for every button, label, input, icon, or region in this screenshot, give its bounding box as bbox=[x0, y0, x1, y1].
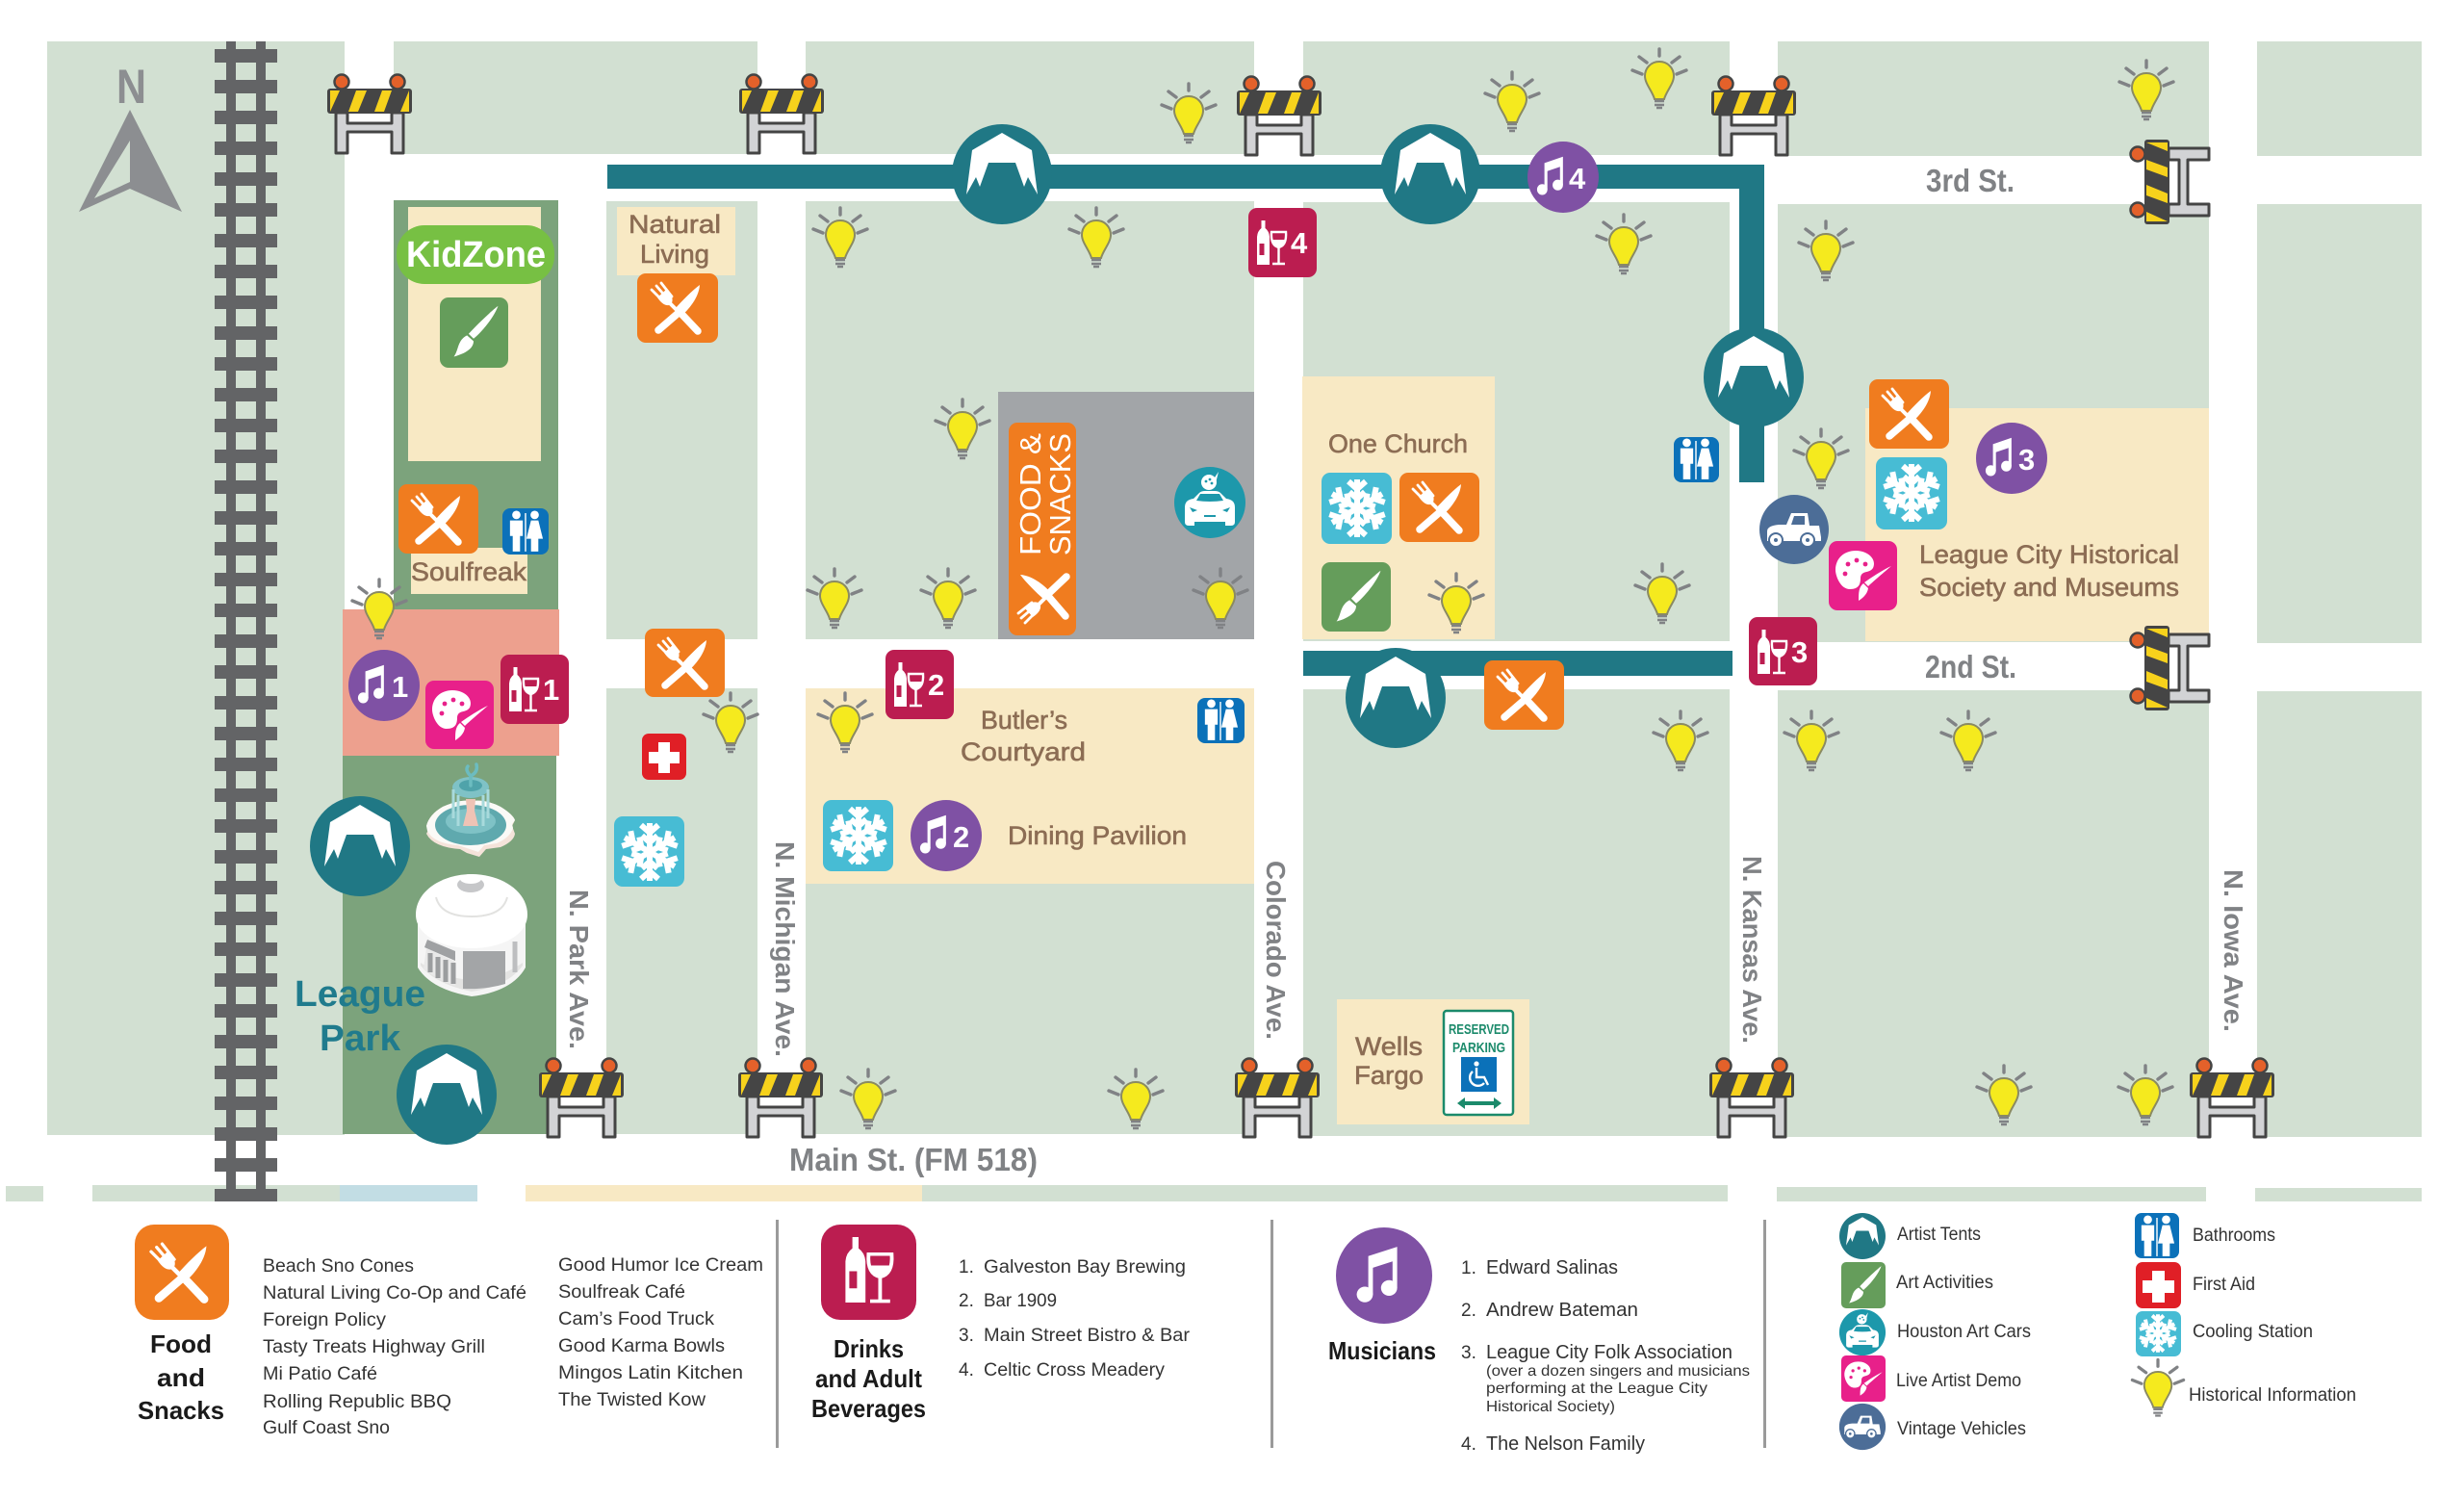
list: food vendors column 2: The Twisted Kow bbox=[558, 1390, 706, 1410]
icon: cooling park bbox=[614, 816, 684, 887]
label: League City Historical Society and Museums: Society and Museums bbox=[1919, 573, 2179, 602]
label: KidZone: KidZone bbox=[406, 235, 546, 275]
list: drinks venues bbox=[959, 1257, 1191, 1381]
label: Dining Pavilion: Dining Pavilion bbox=[1008, 821, 1187, 850]
label: League City Historical Society and Museums: League City Historical bbox=[1919, 540, 2179, 569]
label: Butler's Courtyard bbox=[961, 706, 1086, 766]
key: art activities: Art Activities bbox=[1896, 1273, 1993, 1293]
list: food vendors column 2: Mingos Latin Kitchen bbox=[558, 1363, 743, 1383]
icon: historical bulb bbox=[1794, 429, 1848, 488]
panel: food and snacks sign bbox=[1009, 423, 1077, 635]
list: food vendors column 1: Rolling Republic BBQ bbox=[263, 1392, 451, 1412]
list: food vendors column 1: Gulf Coast Sno bbox=[263, 1418, 390, 1438]
key: vintage vehicles: Vintage Vehicles bbox=[1897, 1419, 2026, 1439]
street label: Main St.: Main St. (FM 518) bbox=[789, 1142, 1038, 1177]
icon: historical bulb bbox=[704, 693, 757, 752]
icon: musician 3 bbox=[1976, 423, 2047, 494]
list: food vendors column 1: Tasty Treats Highway Grill bbox=[263, 1337, 485, 1357]
barricade bbox=[1711, 77, 1796, 155]
icon: artist tent bbox=[310, 796, 410, 896]
icon: food Soulfreak bbox=[398, 484, 478, 554]
key: houston art cars bbox=[1839, 1309, 2031, 1355]
icon: historical bulb bbox=[818, 693, 872, 752]
list: drinks venues: Galveston Bay Brewing bbox=[984, 1257, 1186, 1278]
street label: 3rd St.: 3rd St. bbox=[1926, 163, 2015, 198]
panel: strip tints along Main St bbox=[340, 1185, 922, 1201]
railway bbox=[215, 41, 277, 1201]
label: Wells Fargo: Fargo bbox=[1354, 1061, 1424, 1090]
heading: Food and Snacks: and bbox=[157, 1363, 205, 1392]
street label: 2nd St.: 2nd St. bbox=[1925, 649, 2016, 684]
label: One Church: One Church bbox=[1328, 429, 1468, 458]
icon: cooling League City bbox=[1876, 457, 1947, 529]
icon: drinks bbox=[821, 1225, 916, 1320]
barricade bbox=[1709, 1059, 1794, 1137]
icon: musician 1 bbox=[348, 650, 420, 721]
icon: bathrooms Soulfreak bbox=[502, 508, 549, 555]
heading: Food and Snacks: Snacks bbox=[138, 1396, 224, 1425]
list: drinks venues: 3. bbox=[959, 1326, 974, 1346]
barricade bbox=[1235, 1059, 1320, 1137]
icon: musicians bbox=[1336, 1227, 1432, 1324]
icon: houston art car bbox=[1174, 467, 1245, 538]
icon: artist tent bbox=[1346, 648, 1446, 748]
list: musicians: 2. bbox=[1461, 1301, 1476, 1321]
list: musicians: Edward Salinas bbox=[1486, 1257, 1618, 1278]
street label: N. Kansas Ave.: N. Kansas Ave. bbox=[1737, 856, 1767, 1044]
list: musicians: performing at the League City bbox=[1486, 1381, 1707, 1397]
list: food vendors column 2: Good Humor Ice Cream bbox=[558, 1255, 763, 1276]
barricade bbox=[738, 1059, 823, 1137]
icon: musician 4: 4 bbox=[1569, 162, 1586, 195]
label: Natural Living bbox=[629, 210, 721, 269]
key: cooling station bbox=[2136, 1311, 2313, 1356]
street label: N. Iowa Ave.: N. Iowa Ave. bbox=[2219, 869, 2248, 1032]
icon: artist tent bbox=[397, 1045, 497, 1145]
panel: icon key column 2 bbox=[2132, 1213, 2356, 1415]
icon: cooling One Church bbox=[1322, 473, 1392, 544]
key: historical information bbox=[2132, 1360, 2356, 1415]
icon: drinks 3: 3 bbox=[1791, 635, 1808, 669]
list: musicians: 3. bbox=[1461, 1343, 1476, 1363]
heading: Drinks and Adult Beverages: Drinks bbox=[834, 1334, 904, 1363]
key: live artist demo: Live Artist Demo bbox=[1896, 1371, 2021, 1391]
icon: art activities KidZone bbox=[440, 297, 508, 368]
icon: historical bulb bbox=[1429, 574, 1483, 632]
icon: historical bulb bbox=[813, 208, 867, 267]
list: drinks venues: Main Street Bistro & Bar bbox=[984, 1326, 1191, 1346]
label: Natural Living: Natural bbox=[629, 210, 721, 239]
panel: icon key column 1 bbox=[1839, 1213, 2031, 1450]
key: cooling station: Cooling Station bbox=[2193, 1322, 2313, 1342]
icon: historical bulb bbox=[1784, 711, 1838, 770]
icon: drinks 4: 4 bbox=[1291, 226, 1308, 260]
barricade bbox=[327, 75, 412, 153]
icon: musician 4 bbox=[1527, 142, 1599, 213]
icon: historical bulb bbox=[1597, 215, 1651, 273]
key: vintage vehicles bbox=[1839, 1404, 2026, 1450]
icon: vintage vehicle bbox=[1759, 495, 1829, 564]
key: first aid bbox=[2136, 1262, 2255, 1308]
icon: historical bulb bbox=[921, 569, 975, 628]
icon: musician 1: 1 bbox=[392, 670, 408, 704]
icon: drinks 2: 2 bbox=[928, 668, 944, 702]
image: gazebo bbox=[416, 874, 527, 996]
barricade bbox=[1237, 77, 1322, 155]
label: Wells Fargo bbox=[1354, 1032, 1424, 1090]
icon: historical bulb bbox=[2118, 1066, 2172, 1124]
panel: map blocks bbox=[6, 41, 2422, 1201]
icon: first aid bbox=[642, 734, 686, 780]
icon: historical bulb bbox=[2119, 61, 2173, 119]
panel: venue areas bbox=[617, 207, 2209, 1124]
icon: food 2nd St. west bbox=[645, 629, 725, 697]
icon: historical bulb bbox=[1162, 84, 1216, 142]
key: first aid: First Aid bbox=[2193, 1275, 2255, 1295]
icon: live artist demo park bbox=[425, 681, 494, 749]
list: musicians: 1. bbox=[1461, 1258, 1476, 1278]
icon: historical bulb bbox=[936, 400, 989, 458]
list: musicians bbox=[1461, 1257, 1750, 1455]
list: musicians: The Nelson Family bbox=[1486, 1433, 1645, 1455]
list: food vendors column 1: Foreign Policy bbox=[263, 1310, 387, 1330]
icon: food League City bbox=[1869, 379, 1949, 449]
label: Wells Fargo: Wells bbox=[1355, 1032, 1423, 1061]
barricade: 2nd St. east bbox=[2131, 626, 2209, 710]
list: drinks venues: 2. bbox=[959, 1291, 974, 1311]
list: food vendors column 1: Mi Patio Café bbox=[263, 1364, 377, 1384]
panel: food and snacks sign: SNACKS bbox=[1043, 433, 1077, 555]
list: drinks venues: Bar 1909 bbox=[984, 1291, 1057, 1311]
icon: north arrow: N bbox=[116, 60, 146, 114]
icon: historical bulb bbox=[1632, 49, 1686, 108]
icon: historical bulb park bbox=[352, 580, 406, 638]
icon: historical bulb bbox=[1109, 1070, 1163, 1128]
list: food vendors column 1 bbox=[263, 1256, 526, 1438]
list: drinks venues: 4. bbox=[959, 1360, 974, 1381]
list: food vendors column 2: Soulfreak Café bbox=[558, 1282, 685, 1303]
heading: Drinks and Adult Beverages: Beverages bbox=[811, 1394, 926, 1423]
panel: drinks legend bbox=[811, 1225, 1191, 1423]
street label: N. Park Ave.: N. Park Ave. bbox=[564, 890, 594, 1049]
icon: reserved parking sign bbox=[1444, 1011, 1513, 1115]
icon: historical bulb bbox=[1635, 564, 1689, 623]
label: Soulfreak: Soulfreak bbox=[411, 557, 527, 586]
icon: north arrow bbox=[79, 60, 182, 212]
icon: historical bulb bbox=[841, 1070, 895, 1128]
icon: drinks 2 bbox=[886, 650, 954, 719]
icon: artist tent bbox=[1380, 124, 1480, 224]
panel: league park and kid zone greens bbox=[343, 200, 559, 1134]
icon: food One Church bbox=[1399, 473, 1479, 542]
icon: bathrooms east bbox=[1674, 437, 1719, 482]
icon: historical bulb bbox=[1799, 221, 1853, 280]
icon: drinks 4 bbox=[1248, 208, 1317, 277]
label: Natural Living: Living bbox=[640, 240, 709, 269]
label: Butler's Courtyard: Courtyard bbox=[961, 737, 1086, 766]
panel: food and snacks sign: FOOD & bbox=[1014, 433, 1047, 555]
label: League Park bbox=[295, 974, 425, 1059]
icon: musician 3: 3 bbox=[2018, 443, 2035, 477]
list: musicians: Andrew Bateman bbox=[1486, 1300, 1638, 1321]
icon: musician 2 bbox=[911, 800, 982, 871]
icon: historical bulb bbox=[1941, 711, 1995, 770]
heading: Drinks and Adult Beverages: and Adult bbox=[815, 1364, 922, 1393]
heading: Drinks and Adult Beverages bbox=[811, 1334, 926, 1423]
icon: food Natural Living bbox=[637, 273, 718, 343]
street label: N. Michigan Ave.: N. Michigan Ave. bbox=[770, 841, 800, 1057]
barricade: 3rd St. east bbox=[2131, 140, 2209, 224]
artist tent route bbox=[607, 165, 1764, 676]
list: food vendors column 2: Good Karma Bowls bbox=[558, 1336, 725, 1356]
barricade bbox=[739, 75, 824, 153]
icon: drinks 3 bbox=[1749, 617, 1817, 685]
list: musicians: (over a dozen singers and musicians bbox=[1486, 1363, 1750, 1380]
icon: musician 2: 2 bbox=[953, 820, 969, 854]
icon: historical bulb bbox=[1069, 208, 1123, 267]
street label: Colorado Ave.: Colorado Ave. bbox=[1261, 861, 1291, 1040]
list: musicians: League City Folk Association bbox=[1486, 1342, 1732, 1363]
icon: reserved parking sign: RESERVED bbox=[1449, 1021, 1509, 1038]
icon: artist tent bbox=[1704, 327, 1804, 427]
label: League City Historical Society and Museums bbox=[1919, 540, 2179, 602]
icon: artist tent bbox=[952, 124, 1052, 224]
heading: Food and Snacks: Food bbox=[150, 1329, 212, 1358]
list: food vendors column 2: Cam’s Food Truck bbox=[558, 1309, 715, 1329]
key: live artist demo bbox=[1841, 1355, 2021, 1402]
list: musicians: Historical Society) bbox=[1486, 1399, 1615, 1415]
icon: historical bulb bbox=[808, 569, 861, 628]
heading: Food and Snacks bbox=[138, 1329, 224, 1425]
panel: musicians legend bbox=[1328, 1227, 1750, 1455]
key: bathrooms bbox=[2135, 1213, 2275, 1258]
icon: historical bulb bbox=[1194, 569, 1247, 628]
image: fountain bbox=[426, 764, 515, 857]
barricade bbox=[539, 1059, 624, 1137]
label: KidZone bbox=[397, 225, 554, 284]
icon: historical bulb bbox=[1977, 1066, 2031, 1124]
key: art activities bbox=[1841, 1262, 1993, 1308]
key: historical information: Historical Information bbox=[2189, 1385, 2356, 1406]
icon: historical bulb bbox=[1485, 72, 1539, 131]
key: artist tents bbox=[1839, 1213, 1981, 1259]
icon: food and snacks bbox=[135, 1225, 229, 1320]
icon: cooling Butler's bbox=[823, 800, 893, 871]
icon: reserved parking sign: PARKING bbox=[1452, 1040, 1505, 1056]
list: drinks venues: 1. bbox=[959, 1257, 974, 1278]
list: food vendors column 2 bbox=[558, 1255, 763, 1410]
label: Butler's Courtyard: Butler’s bbox=[981, 706, 1067, 735]
icon: drinks 1: 1 bbox=[543, 673, 559, 707]
key: bathrooms: Bathrooms bbox=[2193, 1226, 2275, 1246]
icon: drinks 1 bbox=[500, 655, 569, 724]
list: food vendors column 1: Beach Sno Cones bbox=[263, 1256, 414, 1277]
label: League Park: League bbox=[295, 974, 425, 1015]
key: artist tents: Artist Tents bbox=[1897, 1225, 1981, 1245]
key: houston art cars: Houston Art Cars bbox=[1897, 1322, 2031, 1342]
list: drinks venues: Celtic Cross Meadery bbox=[984, 1360, 1166, 1381]
label: League Park: Park bbox=[320, 1019, 401, 1059]
icon: food 2nd St. east bbox=[1484, 660, 1564, 730]
icon: art activities One Church bbox=[1322, 562, 1391, 632]
list: food vendors column 1: Natural Living Co-Op and Café bbox=[263, 1283, 526, 1303]
heading: Musicians: Musicians bbox=[1328, 1336, 1436, 1365]
icon: bathrooms Butler's bbox=[1197, 698, 1245, 743]
barricade bbox=[2190, 1059, 2274, 1137]
icon: historical bulb bbox=[1654, 711, 1707, 770]
icon: live artist demo League City bbox=[1829, 541, 1897, 610]
list: musicians: 4. bbox=[1461, 1434, 1476, 1455]
panel: food and snacks legend bbox=[135, 1225, 763, 1438]
